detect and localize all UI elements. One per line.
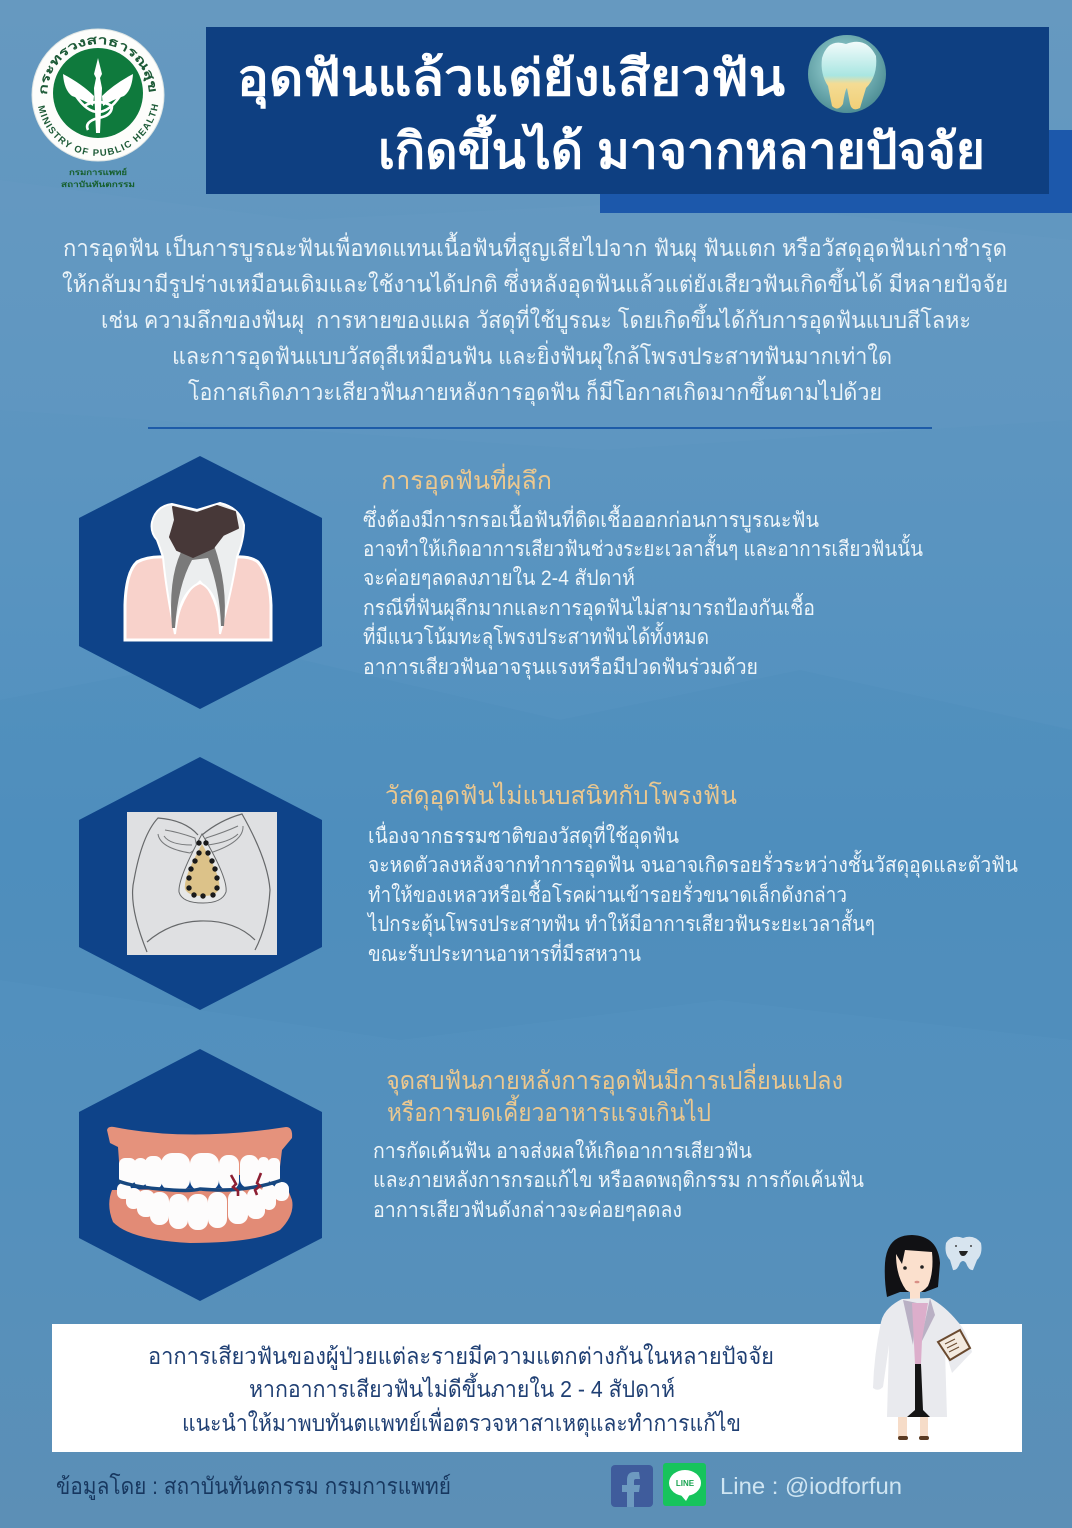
section 1 text: [363, 505, 923, 680]
skirt: [907, 1364, 930, 1417]
section 1 text: กรณีที่ฟันผุลึกมากและการอุดฟันไม่สามารถป้องกันเชื้อ: [363, 593, 815, 621]
callout panel: [52, 1324, 1022, 1452]
title panel: [206, 27, 1049, 194]
intro paragraph: [62, 232, 1008, 406]
hexagon icon: deep cavity tooth: [79, 456, 322, 709]
section 2 heading: วัสดุอุดฟันไม่แนบสนิทกับโพรงฟัน: [385, 781, 737, 811]
icon: line: [663, 1463, 706, 1506]
callout panel: แนะนำให้มาพบทันตแพทย์เพื่อตรวจหาสาเหตุและทำการแก้ไข: [182, 1407, 741, 1437]
section 1 text: จะค่อยๆลดลงภายใน 2-4 สัปดาห์: [363, 566, 635, 590]
section 2 text: ทำให้ของเหลวหรือเชื้อโรคผ่านเข้ารอยรั่วขนาดเล็กดังกล่าว: [368, 880, 847, 907]
pink top: [912, 1303, 928, 1364]
clipboard: [938, 1330, 970, 1360]
logo: ministry of public health: MINISTRY OF PUBLIC HEALTH: [38, 104, 158, 156]
title accent bar: [600, 130, 1072, 213]
face: [896, 1250, 932, 1293]
section 3 text: [373, 1139, 864, 1222]
lower gum: [109, 1187, 292, 1243]
section 2 text: ขณะรับประทานอาหารที่มีรสหวาน: [368, 939, 641, 966]
section 2 text: ไปกระตุ้นโพรงประสาทฟัน ทำให้มีอาการเสียวฟันระยะเวลาสั้นๆ: [366, 909, 875, 937]
icon: glowing tooth: [808, 35, 886, 113]
title line 2: เกิดขึ้นได้ มาจากหลายปัจจัย: [378, 114, 985, 179]
upper teeth: [119, 1153, 280, 1191]
intro paragraph: โอกาสเกิดภาวะเสียวฟันภายหลังการอุดฟัน ก็มีโอกาสเกิดมากขึ้นตามไปด้วย: [188, 376, 882, 406]
tooth body: [152, 503, 244, 634]
intro paragraph: และการอุดฟันแบบวัสดุสีเหมือนฟัน และยิ่งฟันผุใกล้โพรงประสาทฟันมากเท่าใด: [172, 340, 892, 370]
cracks: [231, 1173, 261, 1196]
doctor illustration: [873, 1235, 972, 1440]
icon: smiling tooth: [946, 1237, 982, 1270]
icon: line: LINE: [676, 1479, 695, 1488]
hexagon icon: filling gap diagram: [79, 757, 322, 1010]
decay: [170, 506, 238, 557]
section 3 text: อาการเสียวฟันดังกล่าวจะค่อยๆลดลง: [373, 1199, 682, 1222]
section 3 heading: จุดสบฟันภายหลังการอุดฟันมีการเปลี่ยนแปลง: [386, 1063, 843, 1096]
logo: ministry of public health: กรมการแพทย์: [69, 167, 127, 177]
section 1 text: อาจทำให้เกิดอาการเสียวฟันช่วงระยะเวลาสั้นๆ และอาการเสียวฟันนั้น: [363, 534, 923, 561]
section 1 heading: การอุดฟันที่ผุลึก: [381, 463, 552, 496]
intro paragraph: การอุดฟัน เป็นการบูรณะฟันเพื่อทดแทนเนื้อฟันที่สูญเสียไปจาก ฟันผุ ฟันแตก หรือวัสดุอุดฟันเก่าชำรุด: [63, 232, 1007, 262]
icon: facebook: [611, 1465, 653, 1507]
collar: [903, 1298, 935, 1345]
intro paragraph: เช่น ความลึกของฟันผุ การหายของแผล วัสดุที่ใช้บูรณะ โดยเกิดขึ้นได้กับการอุดฟันแบบสีโลหะ: [101, 304, 971, 334]
section 3 heading: [386, 1063, 843, 1127]
title line 1: อุดฟันแล้วแต่ยังเสียวฟัน: [237, 50, 785, 109]
upper gum: [107, 1127, 292, 1175]
coat: [873, 1298, 972, 1417]
intro paragraph: ให้กลับมามีรูปร่างเหมือนเดิมและใช้งานได้ปกติ ซึ่งหลังอุดฟันแล้วแต่ยังเสียวฟันเกิดขึ้นได้ มีหลายปัจจัย: [62, 268, 1008, 298]
section 2 text: จะหดตัวลงหลังจากทำการอุดฟัน จนอาจเกิดรอยรั่วระหว่างชั้นวัสดุอุดและตัวฟัน: [368, 850, 1018, 878]
section 3 text: การกัดเค้นฟัน อาจส่งผลให้เกิดอาการเสียวฟัน: [373, 1139, 752, 1163]
section 2 text: เนื่องจากธรรมชาติของวัสดุที่ใช้อุดฟัน: [368, 821, 679, 849]
logo: ministry of public health: กระทรวงสาธารณสุข: [40, 36, 156, 94]
callout panel: อาการเสียวฟันของผู้ป่วยแต่ละรายมีความแตกต่างกันในหลายปัจจัย: [148, 1343, 774, 1370]
hexagon icon: teeth grinding: [79, 1049, 322, 1301]
bite gap: [118, 1180, 282, 1190]
hair: [885, 1235, 940, 1297]
section 3 heading: หรือการบดเคี้ยวอาหารแรงเกินไป: [387, 1094, 711, 1127]
line handle: Line : @iodforfun: [720, 1473, 902, 1499]
section 2 text: [366, 821, 1018, 966]
logo: ministry of public health: สถาบันทันตกรรม: [61, 180, 135, 189]
section 1 text: ซึ่งต้องมีการกรอเนื้อฟันที่ติดเชื้อออกก่อนการบูรณะฟัน: [363, 505, 819, 533]
lower teeth: [117, 1182, 289, 1230]
pulp canals: [171, 545, 225, 628]
legs: [898, 1417, 907, 1437]
section 1 text: อาการเสียวฟันอาจรุนแรงหรือมีปวดฟันร่วมด้วย: [363, 656, 758, 680]
section 3 text: และภายหลังการกรอแก้ไข หรือลดพฤติกรรม การกัดเค้นฟัน: [373, 1168, 864, 1192]
section 1 text: ที่มีแนวโน้มทะลุโพรงประสาทฟันได้ทั้งหมด: [363, 622, 709, 650]
gum: [125, 557, 271, 640]
footer source text: ข้อมูลโดย : สถาบันทันตกรรม กรมการแพทย์: [56, 1473, 451, 1500]
logo: ministry of public health: [32, 28, 164, 189]
callout panel: หากอาการเสียวฟันไม่ดีขึ้นภายใน 2 - 4 สัปดาห์: [249, 1373, 675, 1402]
